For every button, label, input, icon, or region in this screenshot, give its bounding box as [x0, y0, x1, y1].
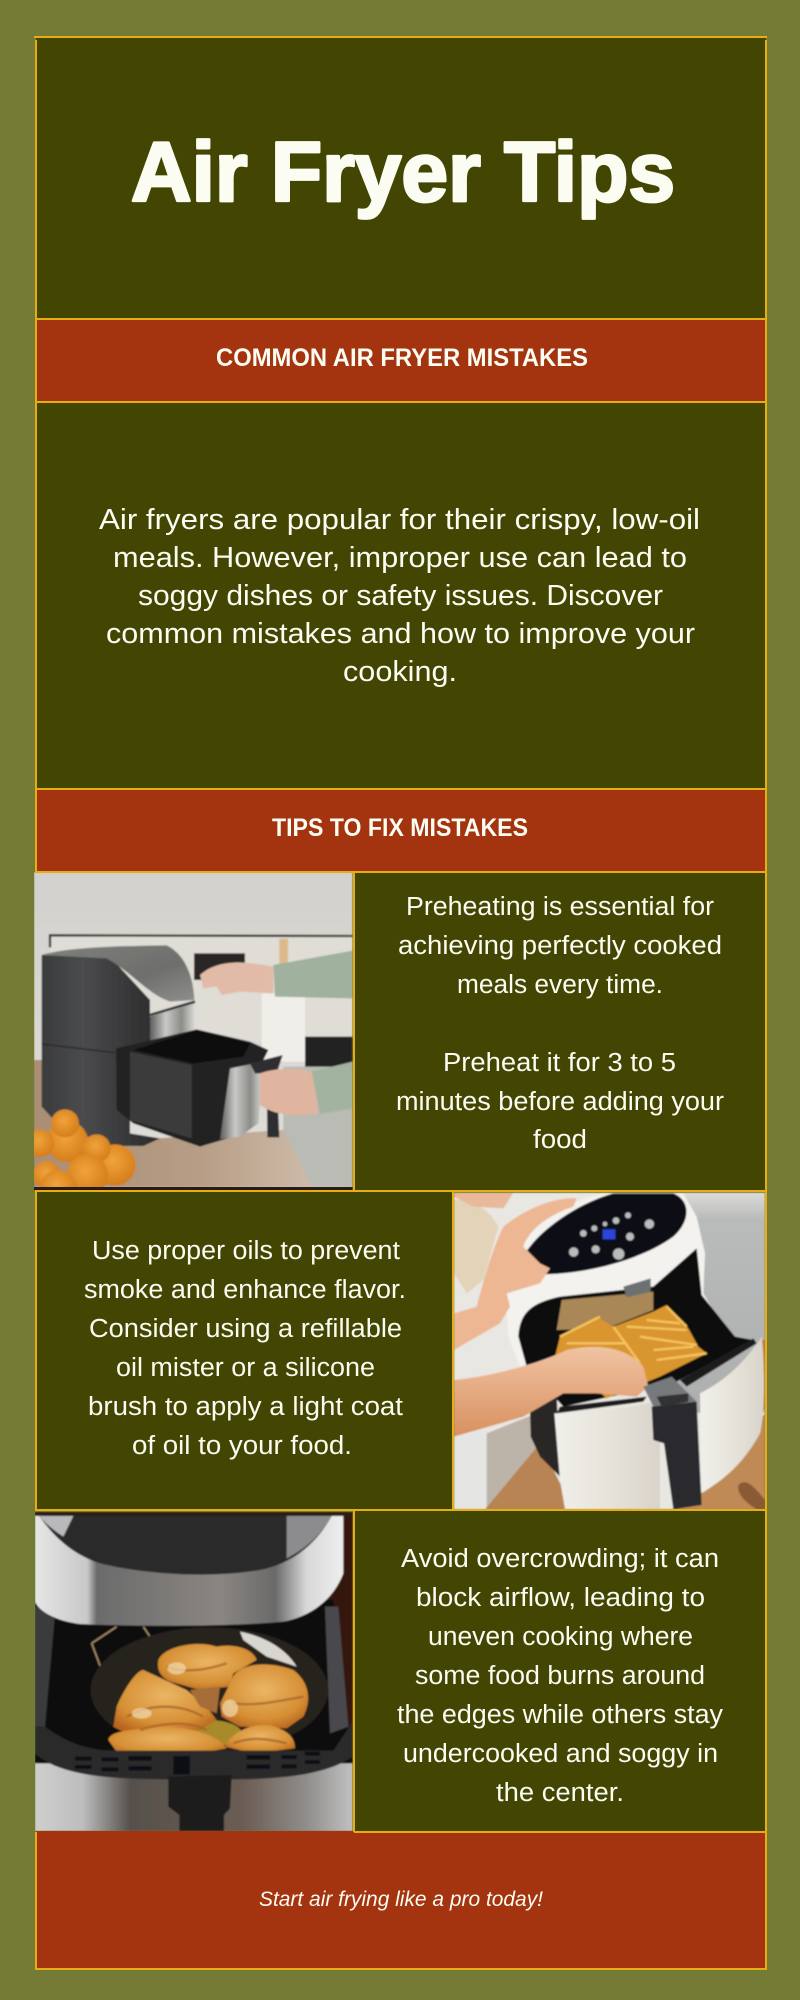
panel: tips heading band — [36, 789, 766, 872]
oil tip text: of oil to your food. — [132, 1432, 352, 1460]
intro paragraph: soggy dishes or safety issues. Discover — [138, 580, 663, 612]
oil tip text: brush to apply a light coat — [88, 1393, 403, 1421]
image: white air fryer with fries and hands — [454, 1193, 765, 1509]
panel: common mistakes heading band — [36, 319, 766, 402]
preheating tip text: minutes before adding your — [396, 1088, 725, 1116]
intro paragraph: Air fryers are popular for their crispy, low-oil — [99, 504, 700, 536]
intro paragraph — [99, 504, 700, 688]
heading: tips to fix mistakes: TIPS TO FIX MISTAKES — [272, 814, 528, 842]
overcrowding tip text: Avoid overcrowding; it can — [401, 1545, 719, 1573]
panel: preheating tip — [354, 872, 766, 1191]
overcrowding tip text: the center. — [496, 1779, 624, 1807]
heading: common air fryer mistakes: COMMON AIR FRYER MISTAKES — [216, 344, 588, 372]
preheating tip text: meals every time. — [457, 971, 663, 999]
image: stainless air fryer with roasted chicken — [35, 1512, 353, 1831]
overcrowding tip text — [397, 1545, 723, 1807]
panel: introduction — [36, 402, 766, 789]
title: Air Fryer Tips — [131, 125, 675, 219]
preheating tip text — [396, 893, 725, 1154]
panel: closing call to action — [36, 1831, 766, 1969]
panel: oil tip — [36, 1191, 453, 1510]
preheating tip text: Preheating is essential for — [406, 893, 715, 921]
overcrowding tip text: the edges while others stay — [397, 1701, 723, 1729]
preheating tip text: Preheat it for 3 to 5 — [443, 1049, 676, 1077]
oil tip text: oil mister or a silicone — [116, 1354, 375, 1382]
intro paragraph: meals. However, improper use can lead to — [113, 542, 687, 574]
panel: overcrowding tip — [354, 1511, 766, 1832]
intro paragraph: cooking. — [343, 656, 457, 688]
intro paragraph: common mistakes and how to improve your — [106, 618, 695, 650]
closing line: Start air frying like a pro today! — [259, 1888, 543, 1911]
panel: title — [36, 38, 766, 319]
oil tip text: smoke and enhance flavor. — [84, 1276, 406, 1304]
preheating tip text: achieving perfectly cooked — [398, 932, 722, 960]
oil tip text: Use proper oils to prevent — [92, 1237, 400, 1265]
oil tip text — [84, 1237, 406, 1460]
preheating tip text: food — [533, 1126, 587, 1154]
overcrowding tip text: undercooked and soggy in — [403, 1740, 718, 1768]
overcrowding tip text: block airflow, leading to — [416, 1584, 705, 1612]
overcrowding tip text: uneven cooking where — [428, 1623, 693, 1651]
overcrowding tip text: some food burns around — [415, 1662, 705, 1690]
oil tip text: Consider using a refillable — [89, 1315, 402, 1343]
image: air fryer basket pulled out on counter — [26, 872, 353, 1207]
